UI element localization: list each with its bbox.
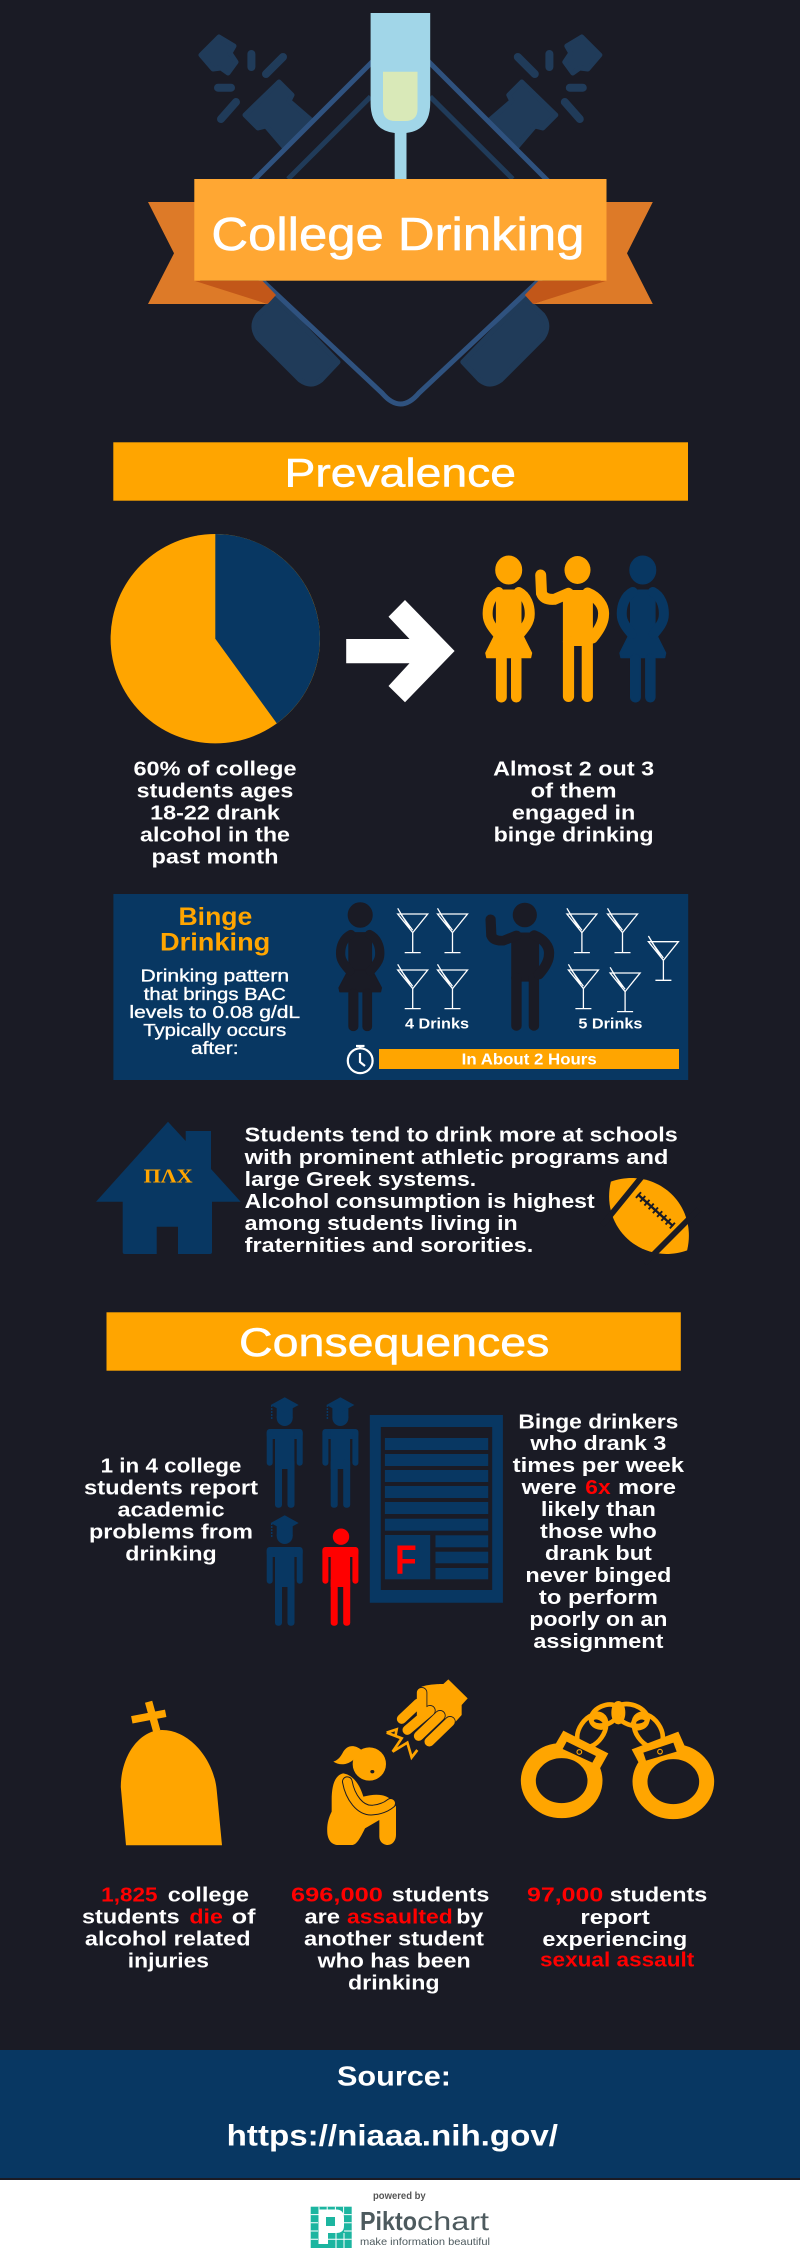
binge drinking definition: levels to 0.08 g/dL — [129, 1002, 300, 1022]
text: binge drinkers 6x: those who — [540, 1521, 657, 1543]
grade F: F — [395, 1537, 417, 1583]
text: deaths: 1,825 — [101, 1885, 158, 1907]
text: deaths: alcohol related — [85, 1928, 251, 1950]
text: assaults: drinking — [348, 1972, 440, 1994]
text: deaths: die — [189, 1906, 223, 1928]
bar: in about 2 hours: In About 2 Hours — [462, 1051, 597, 1068]
text: binge share: binge drinking — [494, 825, 654, 847]
icon: five martini glasses — [567, 908, 678, 1012]
icon: woman silhouette — [339, 903, 382, 1031]
text: academic problems: 1 in 4 college — [101, 1456, 241, 1478]
text: athletics and greek life — [244, 1125, 678, 1257]
greek letters: ΠΛΧ — [144, 1166, 193, 1188]
tagline: make information beautiful — [360, 2236, 490, 2248]
text: binge share: Almost 2 out 3 — [493, 759, 654, 781]
text: binge share: engaged in — [512, 803, 635, 825]
icon: burst lines — [218, 54, 583, 119]
text: 60 percent: 60% of college — [134, 759, 296, 781]
diamond frame — [206, 54, 595, 404]
text: 60 percent: 18-22 drank — [150, 803, 281, 825]
binge drinking definition — [129, 966, 300, 1058]
panel: source: Source: — [337, 2061, 451, 2092]
icon: man silhouette — [491, 903, 549, 1031]
binge drinking heading: Binge — [178, 903, 252, 931]
panel: binge drinking — [113, 894, 688, 1080]
text: binge share: of them — [531, 781, 617, 803]
heading: Consequences: Consequences — [239, 1321, 549, 1365]
icon: Piktochart logo — [311, 2207, 352, 2248]
binge drinking definition: after: — [191, 1038, 239, 1058]
icon: stopwatch — [348, 1046, 373, 1073]
icon: assault, fist and crouching figure — [327, 1679, 468, 1845]
panel: source: https://niaaa.nih.gov/ — [227, 2120, 559, 2153]
header badge — [148, 13, 653, 404]
icon: failed test paper — [370, 1415, 503, 1603]
ribbon tails — [148, 202, 653, 304]
text: binge drinkers 6x — [513, 1411, 685, 1653]
heading: Prevalence: Prevalence — [284, 452, 516, 496]
text: sexual assault: sexual assault — [540, 1950, 695, 1972]
footer: Piktochart credit: chart — [417, 2206, 490, 2236]
heading: Consequences — [106, 1312, 681, 1371]
text: academic problems: academic — [118, 1500, 224, 1522]
footer: Piktochart credit: powered by — [373, 2191, 426, 2202]
icon: gravestone — [121, 1702, 222, 1845]
icon: champagne glass — [371, 13, 430, 182]
text: sexual assault — [527, 1885, 707, 1972]
binge drinking definition: Typically occurs — [143, 1020, 287, 1040]
footer: Piktochart credit — [0, 2180, 800, 2260]
label: 5 drinks: 5 Drinks — [578, 1015, 642, 1032]
text: sexual assault: 97,000 — [527, 1885, 603, 1907]
title banner — [194, 179, 607, 281]
icon: football — [585, 1153, 713, 1279]
text: academic problems: problems from — [89, 1522, 253, 1544]
text: athletics and greek life: Students tend to drink more at schools — [245, 1125, 678, 1147]
label: 4 drinks: 4 Drinks — [405, 1015, 469, 1032]
text: assaults: another student — [304, 1928, 484, 1950]
title: College Drinking — [211, 208, 584, 260]
text: academic problems — [84, 1456, 258, 1566]
text: binge drinkers 6x: to perform — [539, 1587, 658, 1609]
icon: four students, one red — [267, 1397, 358, 1626]
wordmark: Pikto — [360, 2206, 417, 2236]
text: athletics and greek life: Alcohol consumption is highest — [245, 1191, 595, 1213]
text: academic problems: students report — [84, 1478, 258, 1500]
text: binge drinkers 6x: likely than — [541, 1499, 656, 1521]
text: binge drinkers 6x: who drank 3 — [529, 1433, 666, 1455]
icon: three people — [486, 556, 666, 702]
text: binge drinkers 6x: assignment — [533, 1631, 664, 1653]
text: binge drinkers 6x: drank but — [545, 1543, 652, 1565]
text: sexual assault: report — [580, 1907, 650, 1929]
text: binge share — [493, 759, 654, 847]
text: deaths — [82, 1885, 256, 1972]
text: assaults: are — [304, 1906, 340, 1928]
text: athletics and greek life: among students living in — [245, 1213, 518, 1235]
text: 60 percent: past month — [152, 847, 278, 869]
text: binge drinkers 6x: never binged — [525, 1565, 671, 1587]
text: assaults: who has been — [316, 1950, 471, 1972]
text: binge drinkers 6x: more — [618, 1477, 676, 1499]
text: deaths: students — [82, 1906, 180, 1928]
text: assaults: students — [392, 1885, 489, 1907]
text: deaths: of — [232, 1906, 256, 1928]
text: athletics and greek life: fraternities and sororities. — [245, 1235, 533, 1257]
text: sexual assault: students — [610, 1885, 707, 1907]
binge drinking heading: Drinking — [160, 929, 270, 957]
bar: in about 2 hours — [379, 1049, 679, 1069]
text: assaults — [291, 1885, 489, 1994]
icon: bottles behind badge — [201, 37, 600, 384]
text: deaths: college — [168, 1885, 249, 1907]
arrow — [346, 600, 455, 702]
text: binge drinkers 6x: poorly on an — [529, 1609, 667, 1631]
pie chart: 60 percent — [111, 534, 320, 743]
text: binge drinkers 6x: times per week — [513, 1455, 685, 1477]
text: 60 percent — [134, 759, 296, 869]
text: binge drinkers 6x: were — [520, 1477, 577, 1499]
text: assaults: assaulted — [347, 1906, 453, 1928]
text: sexual assault: experiencing — [542, 1929, 687, 1951]
text: binge drinkers 6x: Binge drinkers — [518, 1411, 678, 1433]
binge drinking heading — [160, 903, 270, 957]
text: 60 percent: students ages — [137, 781, 293, 803]
icon: fraternity house — [96, 1122, 241, 1254]
icon: handcuffs — [528, 1700, 707, 1812]
text: 60 percent: alcohol in the — [140, 825, 290, 847]
text: binge drinkers 6x: 6x — [585, 1477, 611, 1499]
binge drinking definition: Drinking pattern — [141, 966, 289, 986]
text: assaults: 696,000 — [291, 1885, 383, 1907]
binge drinking definition: that brings BAC — [144, 984, 286, 1004]
text: academic problems: drinking — [125, 1544, 217, 1566]
panel: source — [0, 2050, 800, 2178]
text: athletics and greek life: large Greek systems. — [245, 1169, 476, 1191]
text: assaults: by — [456, 1906, 484, 1928]
text: deaths: injuries — [128, 1950, 209, 1972]
heading: Prevalence — [113, 442, 688, 501]
text: athletics and greek life: with prominent athletic programs and — [244, 1147, 668, 1169]
icon: four martini glasses — [398, 908, 468, 1009]
